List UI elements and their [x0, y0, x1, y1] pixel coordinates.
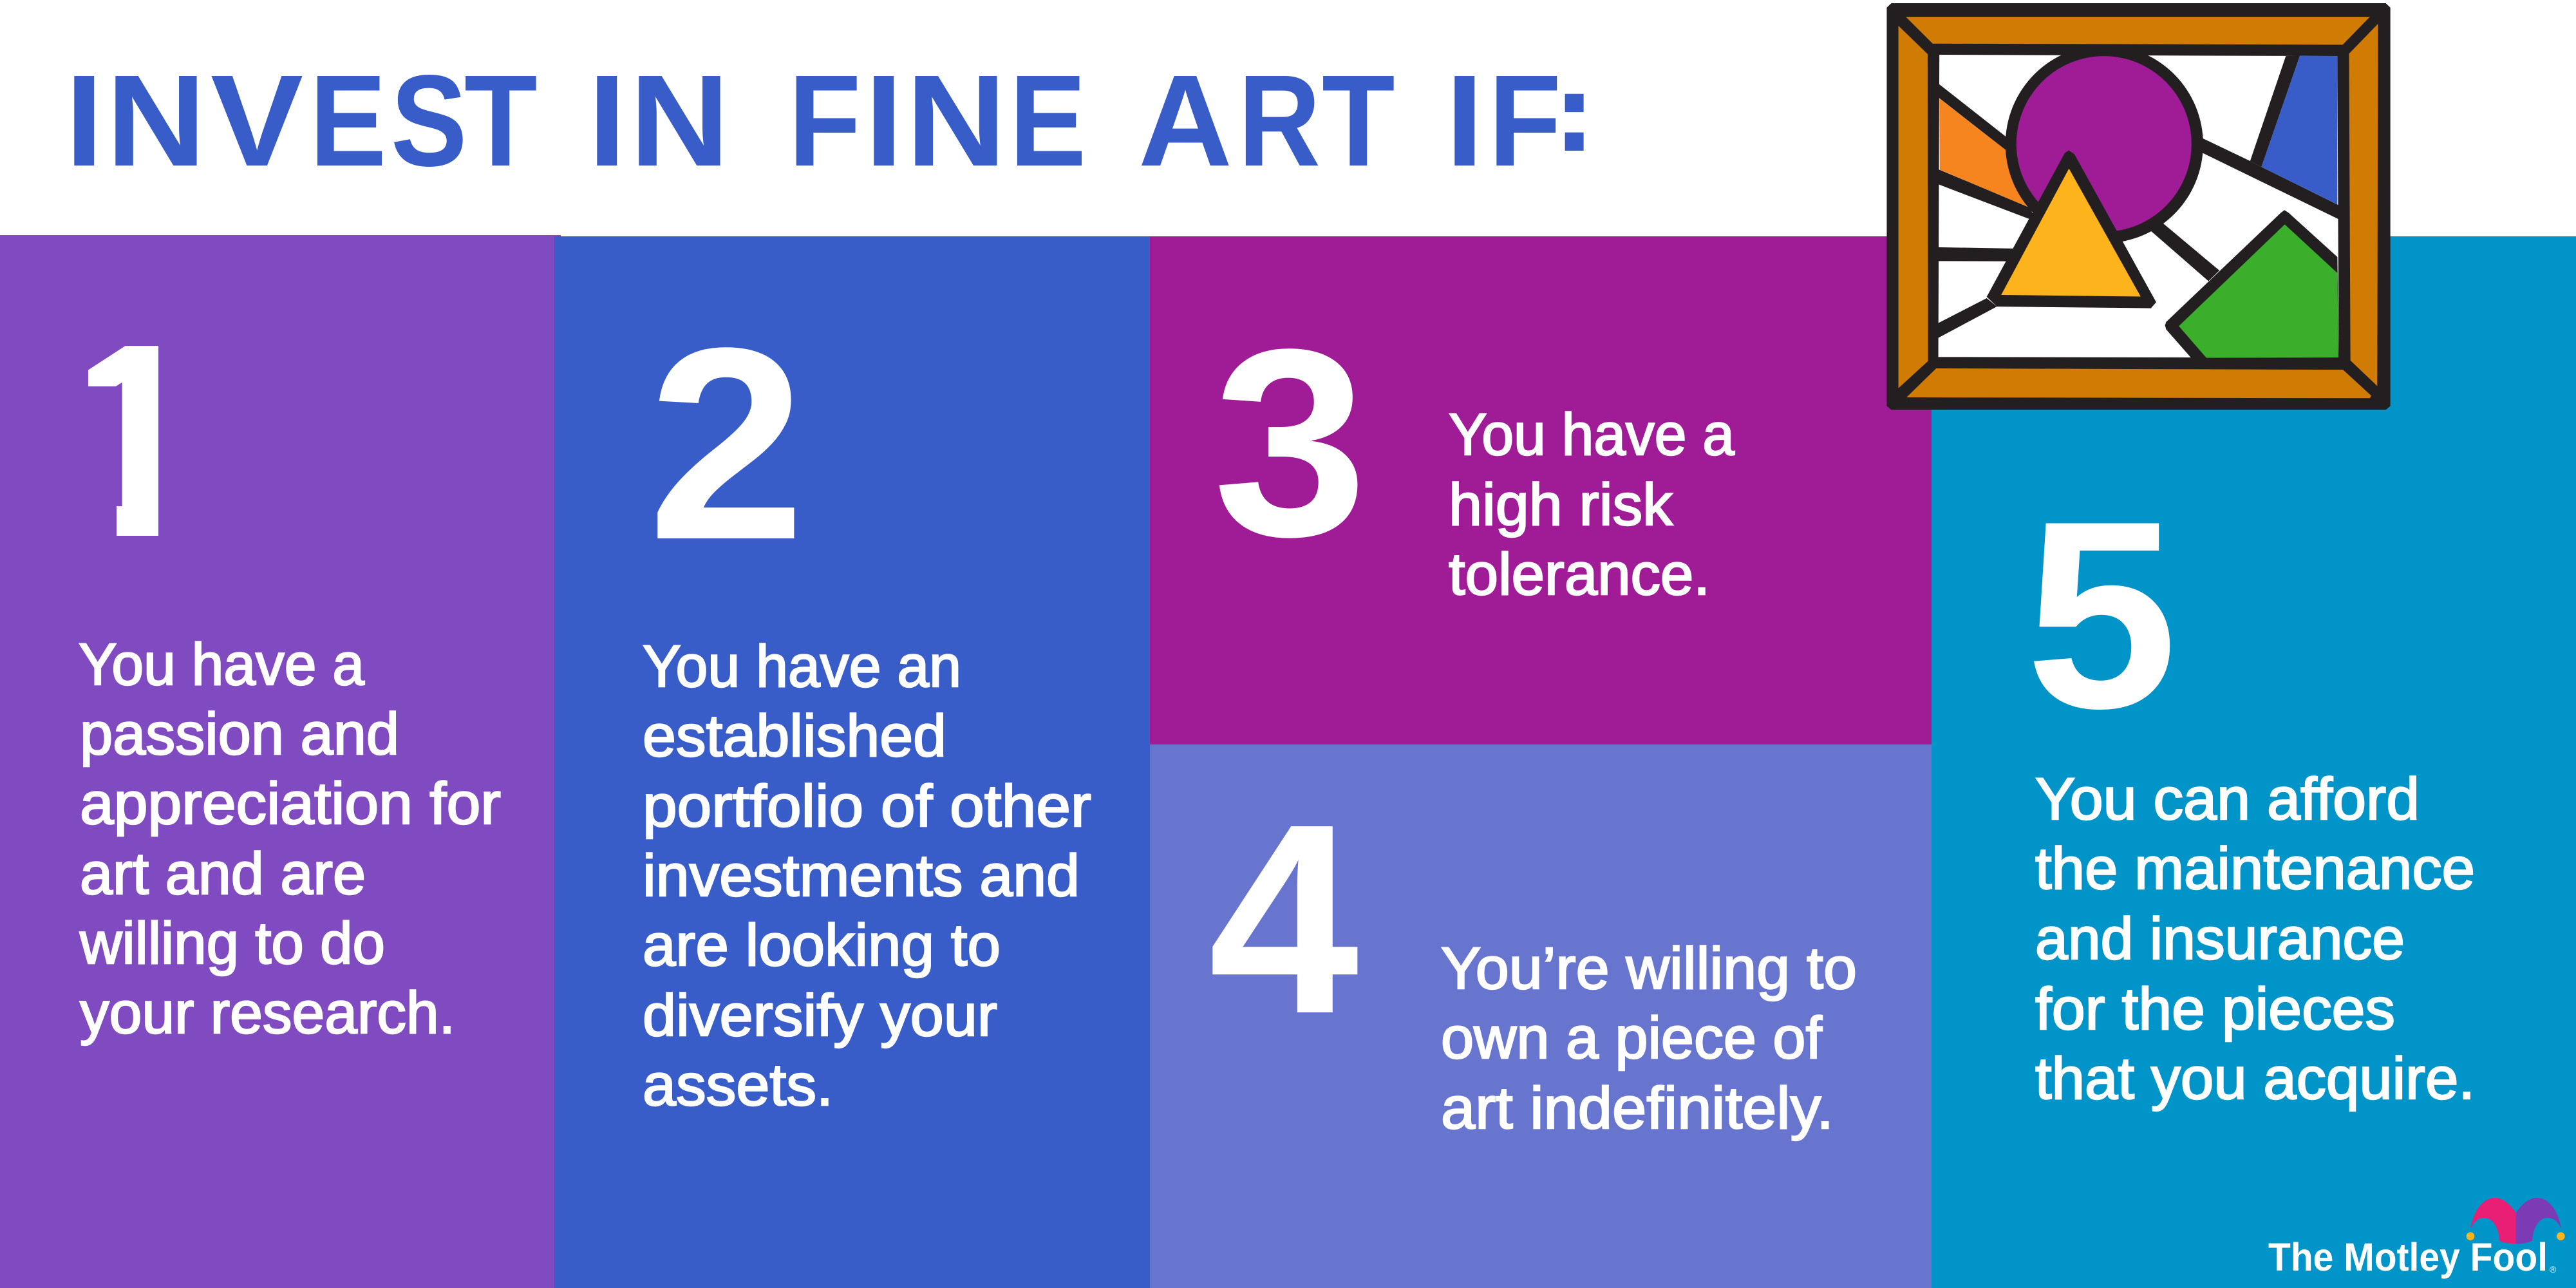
- title: E: [310, 48, 386, 193]
- text block 5: the maintenance: [2035, 836, 2475, 902]
- text block 4: art indefinitely.: [1441, 1075, 1834, 1141]
- logo: The Motley Fool: [2268, 1198, 2565, 1279]
- text block 1: You have a: [79, 632, 365, 697]
- text block 2: You have an: [643, 634, 961, 699]
- title: N: [106, 48, 206, 193]
- title: [65, 48, 1592, 193]
- text block 2: established: [643, 703, 946, 769]
- text block 1: [79, 632, 501, 1046]
- panel 3: magenta: [1150, 236, 1932, 744]
- title: N: [630, 48, 729, 193]
- title: I: [865, 48, 903, 193]
- text block 1: willing to do: [79, 911, 385, 976]
- text block 5: [2035, 766, 2475, 1112]
- text block 5: You can afford: [2035, 766, 2420, 832]
- text block 2: diversify your: [643, 983, 997, 1048]
- panel 4: periwinkle: [1150, 744, 1932, 1288]
- panel 5: teal: [1932, 236, 2576, 1288]
- text block 2: investments and: [643, 843, 1080, 909]
- text block 5: and insurance: [2035, 906, 2405, 972]
- title: T: [464, 48, 538, 193]
- title: A: [1138, 48, 1232, 193]
- panel 2: blue: [554, 236, 1150, 1288]
- number 4: 4: [1208, 768, 1360, 1070]
- title: :: [1557, 53, 1592, 171]
- text block 4: You’re willing to: [1441, 936, 1857, 1001]
- title: E: [1010, 48, 1086, 193]
- title: S: [391, 48, 467, 193]
- text block 5: for the pieces: [2035, 976, 2395, 1042]
- text block 3: tolerance.: [1449, 542, 1710, 607]
- text block 5: that you acquire.: [2035, 1046, 2475, 1112]
- title: R: [1238, 48, 1321, 193]
- wordmark: The Motley Fool: [2268, 1235, 2548, 1279]
- title: V: [211, 48, 303, 193]
- text block 3: You have a: [1449, 402, 1735, 468]
- text block 1: art and are: [80, 841, 366, 907]
- text block 1: your research.: [80, 980, 455, 1046]
- title: I: [588, 48, 626, 193]
- text block 1: passion and: [80, 701, 399, 767]
- number 1: 1: [60, 289, 212, 594]
- title: F: [1489, 48, 1561, 193]
- icon: jester hat: [2467, 1198, 2565, 1244]
- title: F: [788, 48, 861, 193]
- panel 1: purple: [0, 235, 561, 1288]
- title: I: [1445, 48, 1483, 193]
- text block 4: own a piece of: [1441, 1005, 1822, 1071]
- text block 2: portfolio of other: [643, 773, 1091, 839]
- icon: framed abstract painting: [1886, 3, 2391, 410]
- title: I: [65, 48, 103, 193]
- title: N: [906, 48, 1006, 193]
- number 3: 3: [1213, 293, 1368, 592]
- text block 3: [1449, 402, 1735, 607]
- text block 2: assets.: [643, 1052, 833, 1118]
- text block 4: [1441, 936, 1857, 1141]
- text block 1: appreciation for: [80, 771, 501, 837]
- text block 3: high risk: [1449, 472, 1673, 538]
- text block 2: are looking to: [643, 913, 1001, 978]
- title: T: [1322, 48, 1395, 193]
- number 5: 5: [2026, 465, 2177, 764]
- text block 2: [643, 634, 1091, 1118]
- number 2: 2: [648, 291, 805, 597]
- registered mark: ®: [2550, 1264, 2557, 1274]
